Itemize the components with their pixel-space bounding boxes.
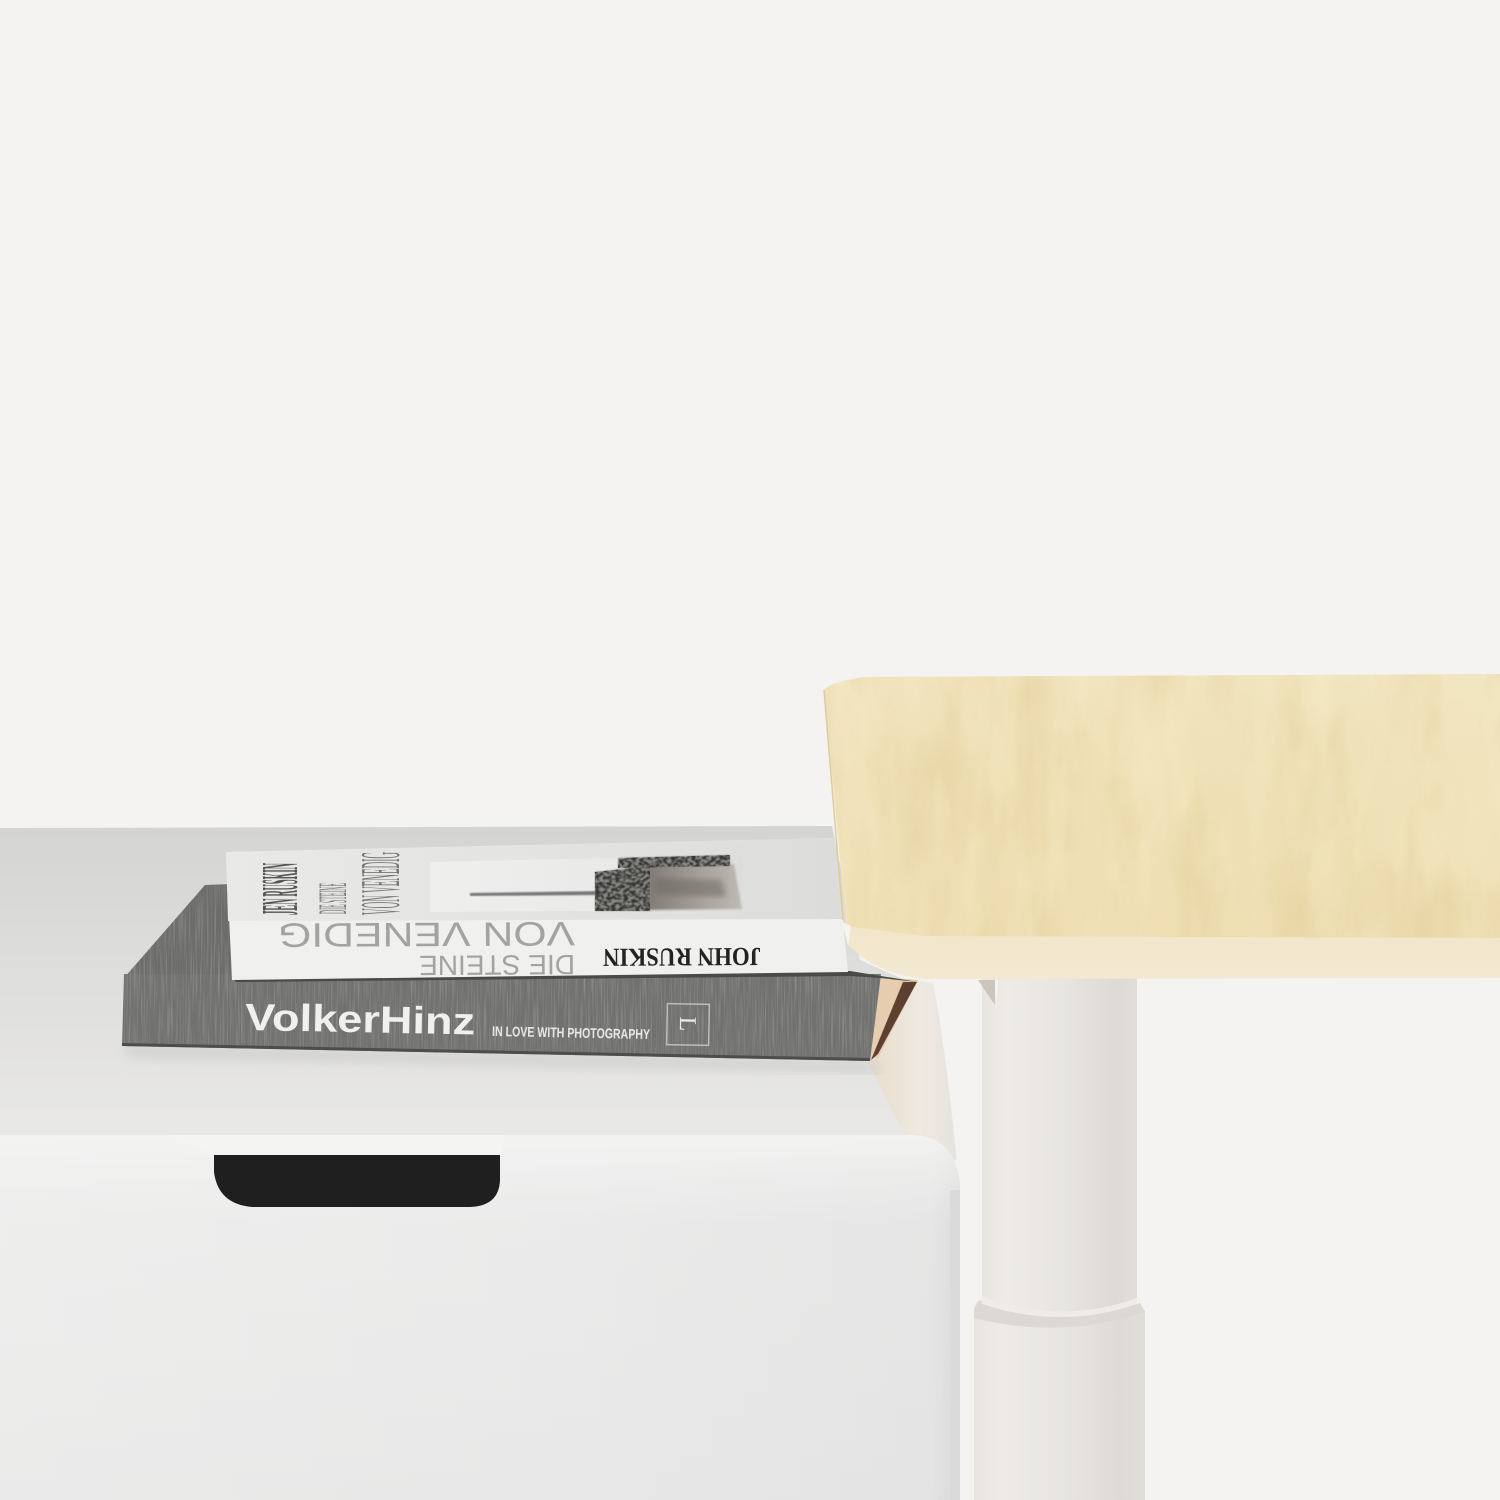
leg collar [974,1300,1145,1328]
desk top [820,670,1500,979]
upside-down title: Von Venedig: VON VENEDIG [278,914,575,954]
book shadow [122,1046,885,1072]
spine subtitle: IN LOVE WITH PHOTOGRAPHY [492,1023,651,1042]
upside-down author: John Ruskin: JOHN RUSKIN [603,942,761,972]
cabinet side highlight [868,980,956,1160]
upside-down title: Die Steine: DIE STEINE [419,949,575,981]
book: Die Steine von Venedig [226,838,848,981]
wood grain [820,670,1500,940]
desk leg [974,978,1145,1500]
lower leg column [974,1310,1145,1500]
publisher box [667,1004,709,1045]
cabinet front drawer [0,1135,960,1500]
leg bracket [978,980,995,1005]
upper leg column [982,978,1137,1313]
publisher box: L [674,1016,700,1032]
book cover [226,838,848,980]
scene: desk, cabinet and books: VON VENEDIG [350,852,412,915]
table edge [844,926,1500,979]
page block [868,976,918,1058]
scene: desk, cabinet and books [0,674,1500,1500]
wood surface [824,674,1500,978]
inverted band [226,838,843,921]
drawer handle [168,1135,505,1207]
panel: cabinet [0,826,960,1500]
scene: desk, cabinet and books: DIE STEINE [310,883,355,914]
book: Volker Hinz [120,880,918,1072]
cabinet top surface [0,826,957,1160]
spine title: VolkerHinz [245,997,476,1043]
back cover edge [871,982,917,1060]
white chamfer at corner [842,922,851,945]
scene: desk, cabinet and books: JEN RUSKIN [252,863,309,915]
wood side edge [824,690,843,920]
cover photograph [430,854,742,912]
book top and spine cloth [120,880,918,1065]
